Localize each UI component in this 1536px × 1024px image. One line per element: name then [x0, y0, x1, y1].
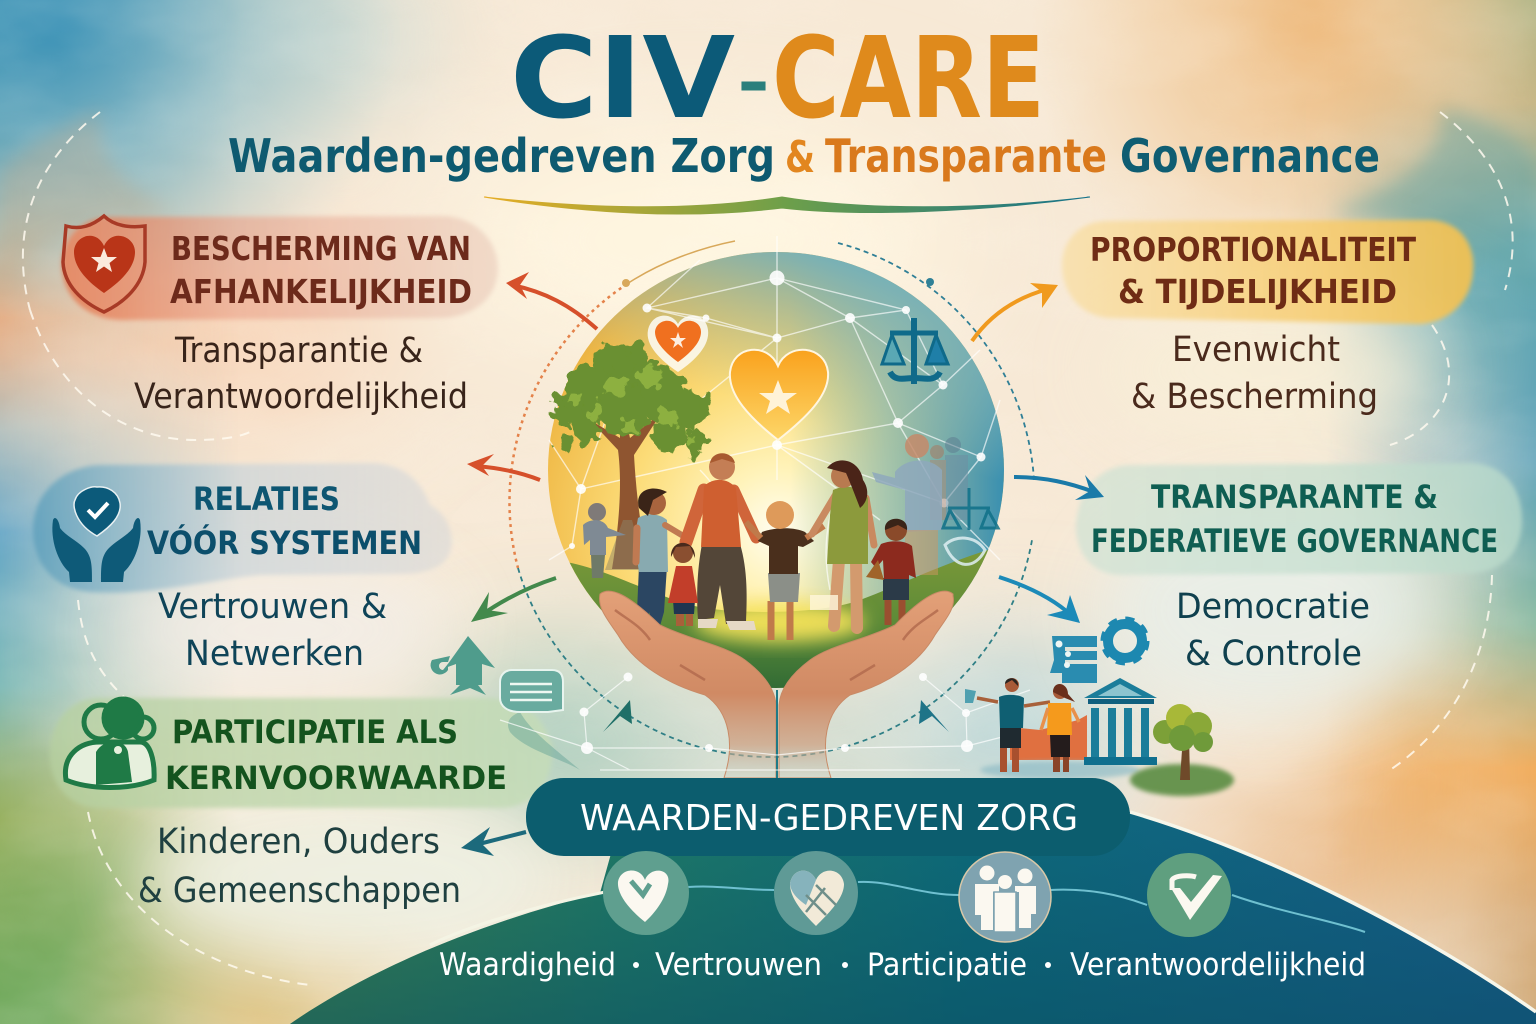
icon: group people: [65, 699, 154, 788]
ground shadow: [980, 761, 1140, 779]
icon: shield heart: [63, 216, 145, 312]
subtitle: Transparante: [825, 129, 1107, 183]
centre child: [746, 501, 824, 640]
panel: proportionaliteit: [1062, 220, 1473, 324]
left hand: [599, 591, 776, 778]
icon: temple: [1084, 678, 1157, 765]
pill: waarden-gedreven zorg: WAARDEN-GEDREVEN ZORG: [580, 798, 1078, 839]
hands: [599, 591, 954, 778]
values row text: [439, 947, 1366, 983]
child left: [634, 489, 690, 626]
outer orbit ring: [509, 241, 1034, 757]
values row text: Participatie: [867, 947, 1027, 983]
arrow: to participatie: [471, 578, 556, 622]
lower network: [500, 672, 1030, 770]
text: kinderen: Kinderen, Ouders: [157, 822, 440, 862]
arrow: to democratie: [999, 577, 1080, 623]
text: transparantie: Verantwoordelijkheid: [134, 377, 468, 417]
island: [1130, 764, 1234, 796]
icon: scales: [882, 318, 948, 384]
panel: proportionaliteit: & TIJDELIJKHEID: [1118, 272, 1397, 311]
text: evenwicht: [1131, 330, 1378, 417]
person: man: [965, 678, 1050, 772]
small house: [810, 595, 838, 610]
icon: trust heart badge: [774, 851, 858, 935]
arrow: to relaties: [467, 454, 540, 480]
icon: heart badge: [603, 851, 689, 935]
network lines: [549, 236, 1000, 590]
scene: governance icons: [965, 619, 1234, 796]
panel: relaties: VÓÓR SYSTEMEN: [147, 523, 422, 562]
family: [634, 453, 916, 640]
text: vertrouwen: [158, 587, 387, 674]
icon: document: [1050, 636, 1097, 683]
values row text: Waardigheid: [439, 947, 616, 983]
arrowhead: lower left: [603, 700, 632, 732]
grass ground: [570, 550, 988, 688]
panel: relaties: [33, 463, 452, 593]
orange backdrop: [1010, 715, 1087, 760]
title swoosh: [484, 197, 1090, 214]
text: democratie: & Controle: [1185, 634, 1362, 674]
panel: transparante governance: [1076, 463, 1522, 575]
panel: participatie: KERNVOORWAARDE: [165, 759, 507, 797]
tree: [552, 342, 711, 570]
icon: hands with check: [52, 487, 141, 582]
icon: gear: [1103, 619, 1147, 663]
values row text: Verantwoordelijkheid: [1070, 947, 1366, 983]
icon: big heart: [730, 350, 828, 440]
panel: relaties: RELATIES: [193, 480, 340, 518]
icon: small heart: [648, 316, 708, 372]
text: vertrouwen: Vertrouwen &: [158, 587, 387, 627]
title: CARE: [772, 14, 1045, 144]
basket: [866, 560, 884, 580]
arrow: to bescherming: [506, 272, 597, 329]
pill: waarden-gedreven zorg: [526, 778, 1130, 856]
right hand: [779, 591, 954, 778]
icon: people badge: [959, 852, 1051, 942]
title: CIV: [510, 14, 735, 144]
text: transparantie: [134, 331, 468, 417]
icon: small teal tree sign: [431, 636, 495, 695]
person: woman: [1041, 684, 1079, 772]
central globe: [548, 236, 1004, 688]
title: [510, 14, 1045, 144]
corner swoosh: right: [1330, 108, 1536, 300]
subtitle: Waarden-gedreven Zorg: [228, 129, 775, 183]
text: transparantie: Transparantie &: [174, 331, 423, 371]
text: evenwicht: Evenwicht: [1172, 330, 1340, 370]
icon: speech bubble: [500, 670, 580, 770]
arrow: to transparante: [1014, 475, 1104, 500]
panel: participatie: PARTICIPATIE ALS: [172, 713, 458, 751]
subtitle: &: [785, 132, 815, 183]
text: vertrouwen: Netwerken: [185, 634, 364, 674]
values row text: Vertrouwen: [655, 947, 822, 983]
panel: transparante governance: TRANSPARANTE &: [1151, 478, 1438, 516]
text: democratie: Democratie: [1176, 587, 1370, 627]
panel: bescherming: BESCHERMING VAN: [171, 229, 471, 268]
text: kinderen: & Gemeenschappen: [138, 871, 461, 911]
text: kinderen: [138, 822, 461, 911]
text: democratie: [1176, 587, 1370, 674]
faded community people: [583, 434, 998, 578]
text: evenwicht: & Bescherming: [1131, 377, 1378, 417]
panel: participatie: [50, 698, 552, 808]
panel: bescherming: [62, 216, 498, 320]
arrow: to proportionaliteit: [972, 283, 1058, 341]
subtitle: Governance: [1120, 129, 1380, 183]
man: [686, 453, 756, 630]
tree small: [1153, 704, 1213, 780]
title: -: [737, 14, 770, 144]
boy right: [871, 519, 916, 625]
panel: proportionaliteit: PROPORTIONALITEIT: [1090, 230, 1416, 269]
arrow: to kinderen: [461, 827, 526, 856]
woman: [812, 460, 874, 628]
panel: bescherming: AFHANKELIJKHEID: [170, 272, 472, 311]
hearts and scales in globe: [648, 316, 948, 440]
small girl: [668, 543, 698, 626]
subtitle: [228, 129, 1380, 183]
bottom hill: [290, 812, 1536, 1024]
arrowhead: lower right: [919, 700, 949, 732]
corner swoosh: left: [0, 108, 175, 300]
value icons: [603, 851, 1231, 942]
icon: check badge: [1147, 853, 1231, 937]
